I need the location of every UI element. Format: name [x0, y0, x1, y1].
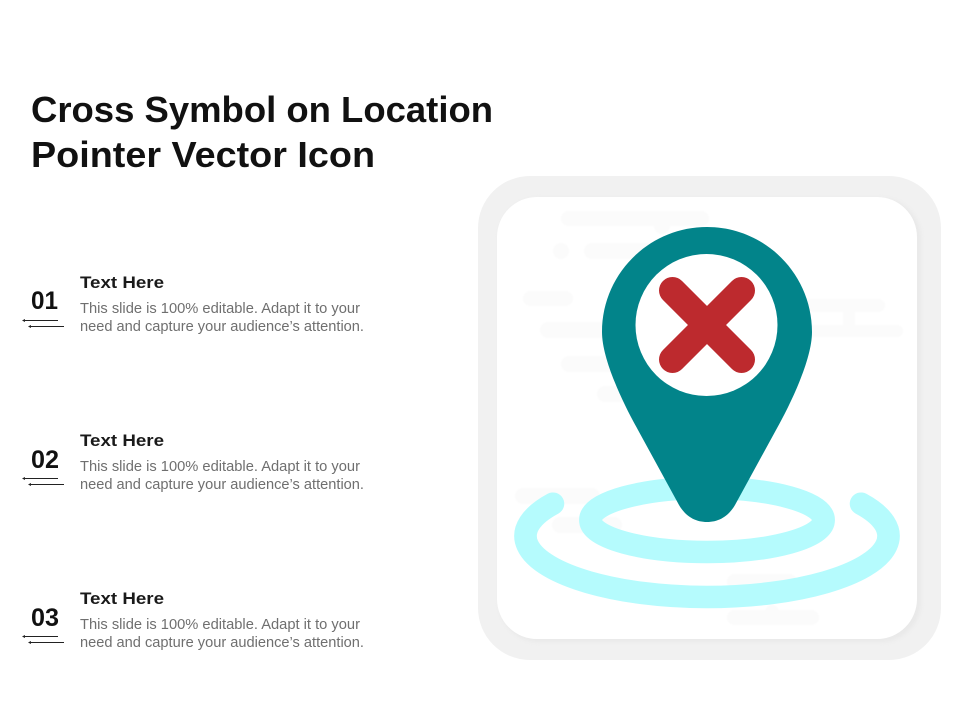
- list item 01: [22, 273, 364, 335]
- red cross: [672, 290, 742, 360]
- number 01: 01: [31, 287, 58, 315]
- description 03: This slide is 100% editable. Adapt it to your: [80, 617, 360, 633]
- description 03: need and capture your audience’s attention.: [80, 635, 364, 651]
- card outer frame: [478, 176, 941, 660]
- list item 03: [22, 589, 364, 651]
- arrows 01: [22, 319, 64, 328]
- description 01: [80, 301, 364, 335]
- description 03: [80, 617, 364, 651]
- number 02: 02: [31, 446, 59, 474]
- card inner shadow: [499, 198, 921, 642]
- description 02: This slide is 100% editable. Adapt it to your: [80, 459, 360, 475]
- title: Pointer Vector Icon: [31, 134, 375, 175]
- arrows 02: [22, 477, 64, 486]
- title: Cross Symbol on Location: [31, 89, 493, 130]
- description 02: [80, 459, 364, 493]
- description 01: This slide is 100% editable. Adapt it to your: [80, 301, 360, 317]
- heading 03: Text Here: [80, 589, 164, 608]
- panel: icon card: [478, 176, 941, 660]
- faint background map pattern: [515, 211, 903, 625]
- ripple rings: [526, 488, 888, 597]
- pin white circle: [636, 254, 778, 396]
- description 02: need and capture your audience’s attention.: [80, 477, 364, 493]
- number 03: 03: [31, 604, 59, 632]
- arrows 03: [22, 635, 64, 644]
- inner ring: [590, 488, 824, 552]
- description 01: need and capture your audience’s attention.: [80, 319, 364, 335]
- list item 02: [22, 431, 364, 493]
- location pin: [602, 227, 812, 522]
- pin body: [602, 227, 812, 522]
- card inner face: [497, 197, 917, 639]
- heading 01: Text Here: [80, 273, 164, 292]
- heading 02: Text Here: [80, 431, 164, 450]
- outer open ring: [526, 504, 888, 597]
- title: [31, 89, 493, 175]
